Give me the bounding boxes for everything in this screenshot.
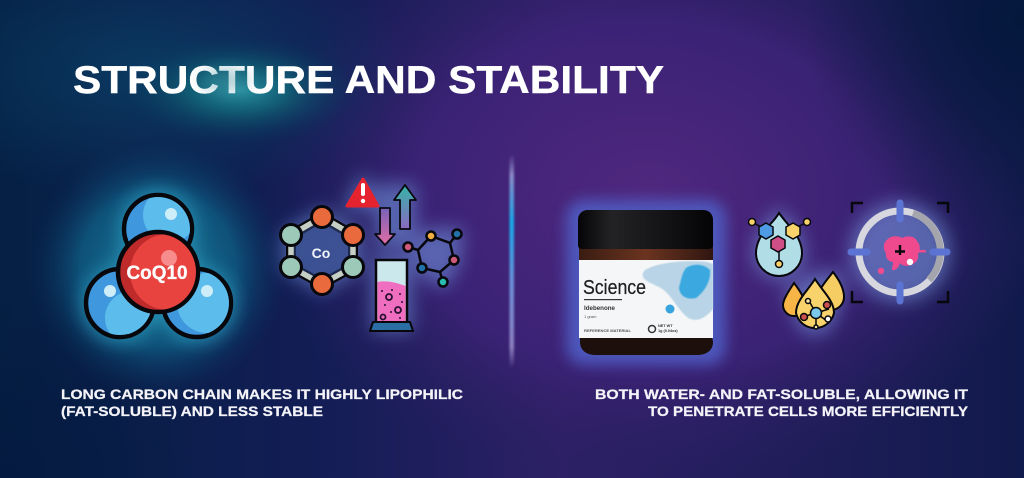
target ring <box>859 211 941 293</box>
product jar <box>566 200 726 365</box>
amber glass <box>579 244 713 264</box>
left blue sphere <box>86 269 159 345</box>
arrow: up <box>394 185 416 229</box>
label: CoQ10 <box>126 263 188 284</box>
icon: cell target <box>851 203 948 302</box>
label brand: Science <box>583 277 646 299</box>
centre red sphere <box>118 232 206 312</box>
label product name: Idebenone <box>584 305 615 312</box>
text: CoQ10 description <box>61 386 463 419</box>
pink cell <box>878 236 926 274</box>
label artwork <box>643 261 713 320</box>
product jar: 1 gram <box>584 314 597 319</box>
text: Idebenone description: TO PENETRATE CELLS MORE EFFICIENTLY <box>648 403 969 419</box>
glow <box>82 190 235 342</box>
icon: small molecule <box>404 230 462 286</box>
text: CoQ10 description: (FAT-SOLUBLE) AND LESS STABLE <box>61 403 323 419</box>
glow behind right icons <box>753 202 950 335</box>
icon: fat-soluble oil drops <box>783 272 844 329</box>
net weight: 1g (0.04oz) <box>658 329 678 333</box>
icon: beaker <box>370 260 413 331</box>
label: Co <box>312 245 330 261</box>
crosshair ticks <box>851 203 947 301</box>
jar glow <box>566 200 726 365</box>
white label <box>579 260 713 338</box>
icon: hexagonal Co molecule <box>280 206 364 294</box>
net weight: NET WT <box>658 324 673 328</box>
icon: warning triangle <box>347 179 378 206</box>
arrow: down <box>375 208 395 245</box>
right blue sphere <box>163 269 237 337</box>
lid <box>578 210 713 249</box>
corner brackets <box>852 203 948 302</box>
icon: water-soluble drop <box>748 213 810 276</box>
text: Idebenone description: BOTH WATER- AND FAT-SOLUBLE, ALLOWING IT <box>595 386 969 402</box>
icon: CoQ10 molecule <box>82 188 237 345</box>
text: CoQ10 description: LONG CARBON CHAIN MAKES IT HIGHLY LIPOPHILIC <box>61 386 463 402</box>
divider <box>510 154 514 368</box>
net weight <box>648 324 678 333</box>
text: Idebenone description <box>595 386 969 419</box>
jar bottom <box>580 336 713 355</box>
product jar: REFERENCE MATERIAL <box>584 329 632 333</box>
title: STRUCTURE AND STABILITY <box>73 59 664 102</box>
glow behind left icons <box>282 172 464 332</box>
top blue sphere <box>122 192 194 245</box>
